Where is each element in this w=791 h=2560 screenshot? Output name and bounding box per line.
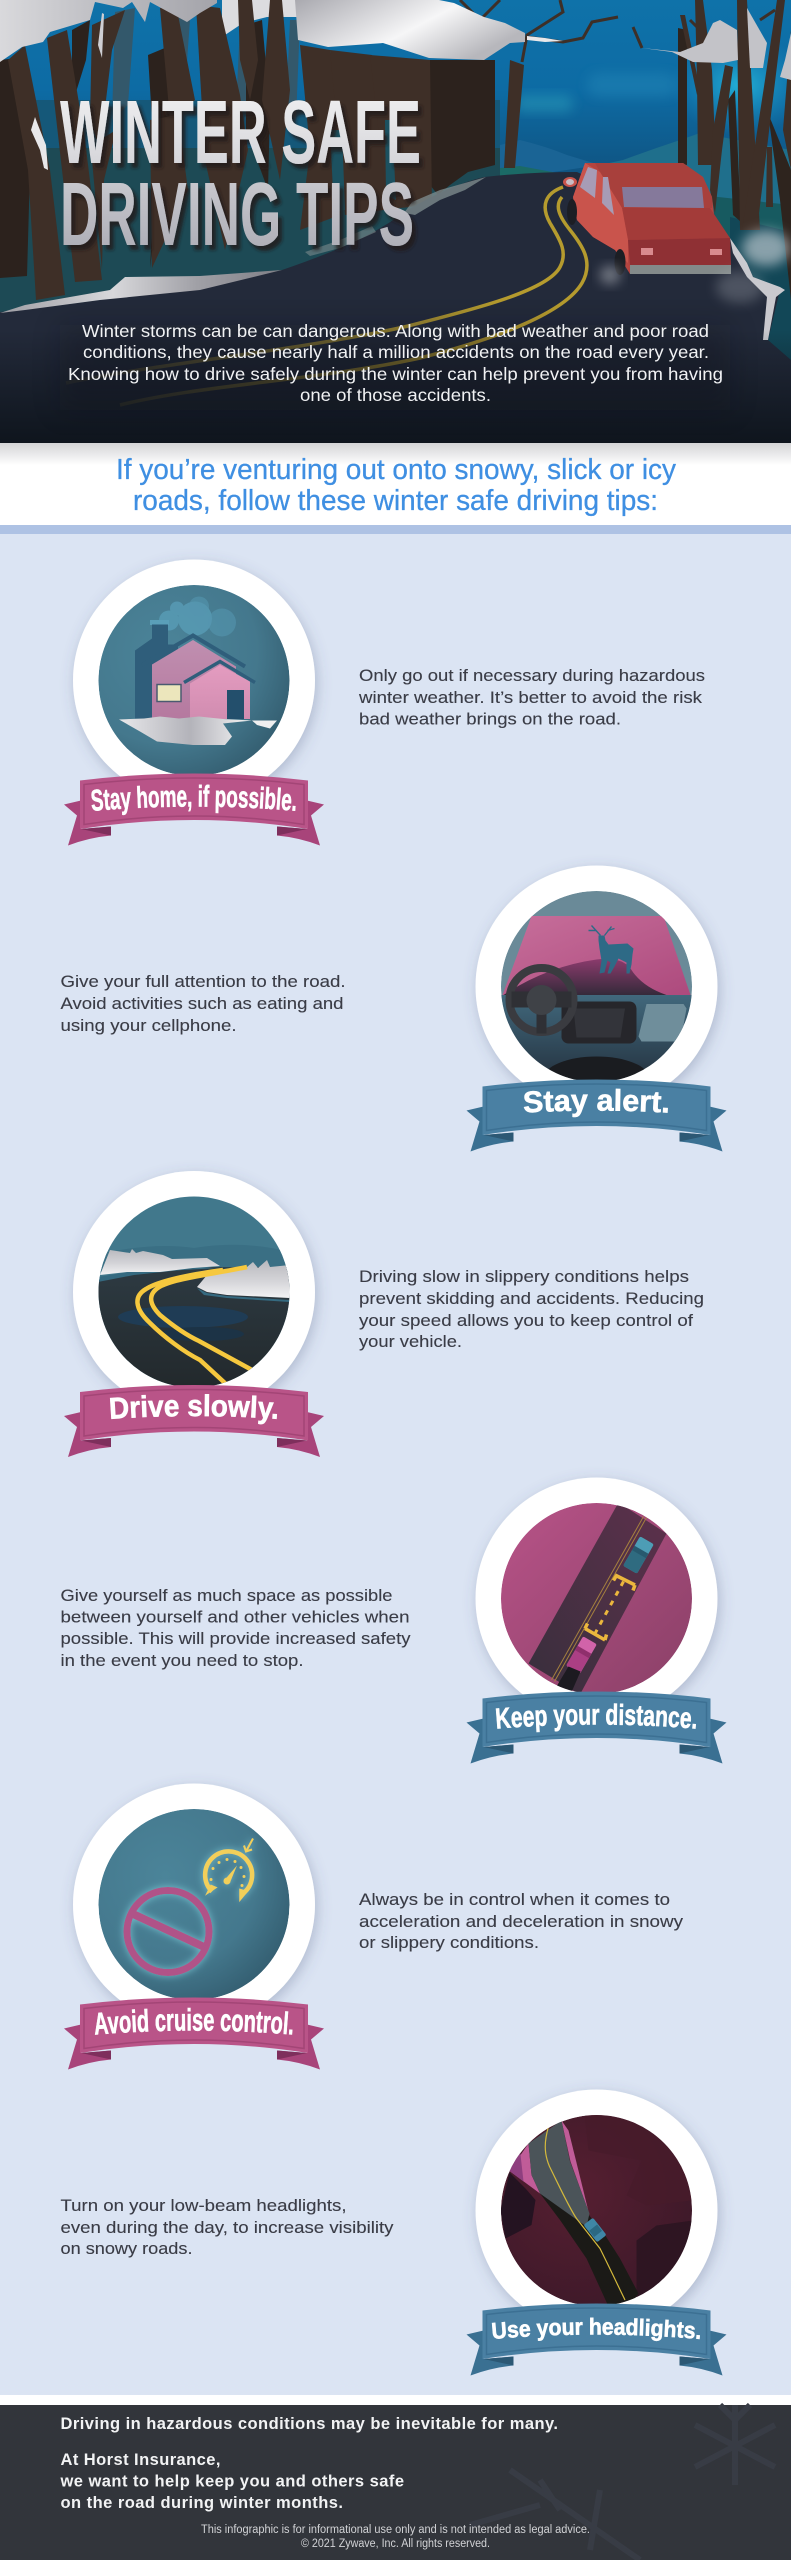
intro text: one of those accidents. bbox=[300, 385, 491, 405]
heading: If you’re venturing out onto snowy, slick or icy bbox=[116, 454, 676, 486]
smoke bbox=[600, 266, 620, 284]
icon: cars at distance bbox=[501, 1502, 692, 1694]
ribbon bbox=[64, 1998, 324, 2070]
text: drive slowly: Driving slow in slippery conditions helps bbox=[359, 1267, 689, 1286]
ribbon: Keep your distance. bbox=[496, 1703, 696, 1732]
footer message: At Horst Insurance, bbox=[60, 2451, 220, 2469]
text: stay alert: Give your full attention to the road. bbox=[60, 972, 346, 991]
tip 6: use your headlights bbox=[466, 2088, 726, 2376]
ribbon bbox=[466, 2304, 726, 2376]
text: stay alert: Avoid activities such as eating and bbox=[60, 994, 344, 1013]
road lines bbox=[66, 187, 587, 405]
white snow patch behind trunks bbox=[222, 0, 296, 34]
intro text bbox=[68, 321, 723, 405]
icon: road bbox=[98, 1196, 290, 1392]
text: keep your distance: possible. This will provide increased safety bbox=[60, 1629, 411, 1648]
text: use your headlights: Turn on your low-beam headlights, bbox=[60, 2196, 346, 2215]
text: keep your distance: Give yourself as much space as possible bbox=[60, 1586, 392, 1605]
tip 3: drive slowly bbox=[64, 1169, 324, 1457]
road bbox=[0, 172, 791, 443]
text: keep your distance: between yourself and other vehicles when bbox=[60, 1608, 410, 1626]
ribbon: Stay alert. bbox=[524, 1088, 668, 1118]
bottom fade bbox=[0, 330, 791, 443]
text: drive slowly bbox=[359, 1267, 704, 1351]
white heading band bbox=[0, 443, 791, 534]
text: avoid cruise control bbox=[359, 1890, 684, 1952]
footer message: we want to help keep you and others safe bbox=[60, 2472, 404, 2490]
text: keep your distance: in the event you need to stop. bbox=[60, 1651, 304, 1670]
icon: headlights on road bbox=[500, 2114, 692, 2306]
text: use your headlights: on snowy roads. bbox=[60, 2239, 192, 2258]
title bbox=[60, 83, 421, 265]
title: WINTER SAFE bbox=[60, 83, 421, 183]
text: stay home: winter weather. It’s better to avoid the risk bbox=[358, 688, 703, 707]
white circle bbox=[476, 1478, 718, 1720]
text: stay home: bad weather brings on the road. bbox=[359, 710, 621, 728]
ribbon bbox=[466, 1080, 726, 1152]
white circle bbox=[73, 1784, 315, 2026]
car bbox=[563, 163, 731, 275]
text: stay alert: using your cellphone. bbox=[60, 1016, 236, 1035]
text: stay home bbox=[358, 666, 705, 728]
heading: roads, follow these winter safe driving tips: bbox=[133, 485, 658, 517]
hills bbox=[500, 140, 592, 172]
title: DRIVING TIPS bbox=[60, 165, 414, 265]
text: drive slowly: your vehicle. bbox=[359, 1332, 462, 1351]
white circle bbox=[73, 1171, 315, 1413]
white circle bbox=[476, 2090, 718, 2332]
text: use your headlights: even during the day, to increase visibility bbox=[60, 2218, 394, 2237]
white circle bbox=[73, 560, 315, 802]
ribbon bbox=[466, 1692, 726, 1764]
text: use your headlights bbox=[60, 2196, 394, 2258]
text: avoid cruise control: or slippery conditions. bbox=[359, 1933, 539, 1952]
disclaimer: © 2021 Zywave, Inc. All rights reserved. bbox=[301, 2538, 490, 2550]
icon: dashboard with deer bbox=[501, 891, 692, 1080]
roadside snow bbox=[0, 270, 282, 313]
ribbon: Stay home, if possible. bbox=[91, 784, 296, 816]
footer message bbox=[60, 2415, 558, 2512]
ribbon bbox=[64, 1385, 324, 1457]
footer message: on the road during winter months. bbox=[60, 2494, 343, 2512]
intro text: Winter storms can be can dangerous. Along with bad weather and poor road bbox=[82, 321, 709, 341]
text: stay home: Only go out if necessary during hazardous bbox=[359, 666, 705, 685]
trees: left forest front layer bbox=[8, 0, 432, 300]
intro text: Knowing how to drive safely during the winter can help prevent you from having bbox=[68, 364, 723, 384]
text: keep your distance bbox=[60, 1586, 411, 1670]
teal ground behind forest bbox=[0, 148, 500, 312]
ribbon: Avoid cruise control. bbox=[94, 2008, 292, 2035]
text: stay alert bbox=[60, 972, 346, 1035]
text: avoid cruise control: Always be in control when it comes to bbox=[359, 1890, 670, 1909]
ribbon: Use your headlights. bbox=[492, 2318, 700, 2342]
disclaimer bbox=[201, 2524, 590, 2550]
heading bbox=[116, 454, 676, 517]
white circle bbox=[476, 866, 718, 1108]
tip 5: avoid cruise control bbox=[64, 1782, 324, 2070]
text: avoid cruise control: acceleration and deceleration in snowy bbox=[359, 1912, 684, 1931]
disclaimer: This infographic is for informational use only and is not intended as legal advice. bbox=[201, 2524, 590, 2536]
header illustration bbox=[0, 0, 791, 443]
trees: right side bbox=[678, 28, 791, 300]
snow clouds bbox=[0, 0, 217, 62]
icon: no cruise control bbox=[98, 1809, 290, 2000]
tip 2: stay alert bbox=[466, 864, 726, 1152]
icon: house bbox=[98, 585, 290, 776]
snowflake decoration bbox=[470, 2405, 775, 2560]
footer panel bbox=[0, 2395, 791, 2560]
ribbon: Drive slowly. bbox=[110, 1394, 278, 1424]
ribbon bbox=[64, 774, 324, 846]
tip 1: stay home bbox=[64, 558, 324, 846]
footer message: Driving in hazardous conditions may be inevitable for many. bbox=[60, 2415, 558, 2433]
tip 4: keep your distance bbox=[466, 1476, 726, 1764]
trees: left forest back layer bbox=[112, 8, 300, 130]
text: drive slowly: your speed allows you to keep control of bbox=[359, 1311, 693, 1330]
text: drive slowly: prevent skidding and accidents. Reducing bbox=[359, 1289, 704, 1308]
intro text: conditions, they cause nearly half a million accidents on the road every year. bbox=[83, 342, 709, 362]
